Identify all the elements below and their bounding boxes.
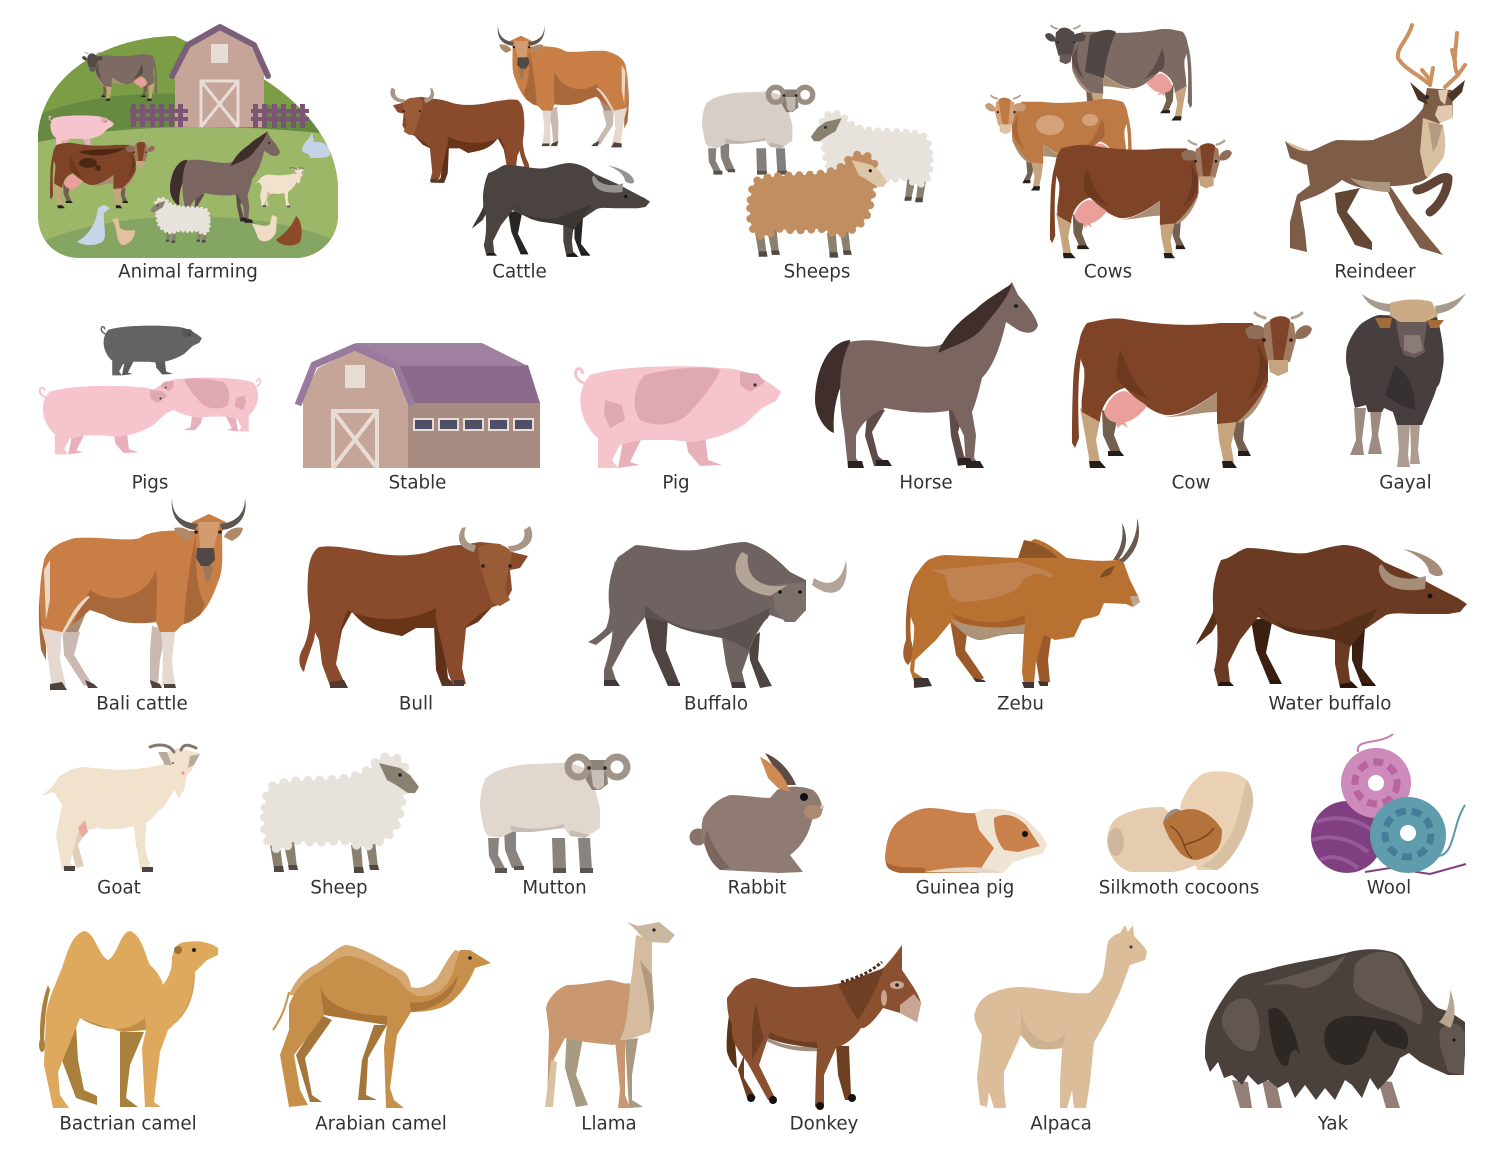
grey cow [1045, 26, 1192, 121]
barn front [303, 350, 408, 468]
label: Pig: Pig [662, 472, 690, 494]
illustration: Zebu [903, 518, 1140, 688]
illustration: Yak [1205, 949, 1465, 1108]
label: Buffalo: Buffalo [684, 694, 748, 714]
side roof [395, 365, 540, 403]
label: Cattle: Cattle [492, 262, 547, 282]
ram [702, 87, 813, 175]
teal yarn [1438, 805, 1465, 856]
illustration: Mutton [480, 757, 627, 873]
label: Alpaca: Alpaca [1030, 1114, 1092, 1134]
illustration: Wool [1311, 734, 1466, 874]
pupa [1163, 809, 1222, 860]
brown chicken [276, 216, 302, 246]
illustration: Reindeer [1285, 25, 1465, 255]
teal ball [1370, 797, 1446, 873]
side wall [405, 402, 540, 468]
panel: Animal farming [38, 27, 340, 258]
pink yarn [1358, 734, 1393, 752]
brown cow [50, 140, 155, 208]
hen [252, 215, 277, 241]
label: Goat: Goat [97, 878, 141, 898]
label: Silkmoth cocoons: Silkmoth cocoons [1099, 878, 1259, 898]
sheep [150, 199, 209, 243]
label: Bali cattle: Bali cattle [96, 694, 188, 714]
illustration: Donkey [727, 945, 921, 1110]
cocoon side shade [1200, 780, 1253, 870]
bali cow [498, 26, 629, 147]
fence [130, 104, 309, 128]
label: Horse: Horse [899, 472, 953, 494]
spotted pig [152, 378, 261, 431]
orange cow [985, 96, 1132, 191]
label: Bull: Bull [399, 694, 433, 714]
label: Animal farming: Animal farming [118, 262, 258, 282]
label: Yak: Yak [1317, 1114, 1349, 1134]
bull [390, 87, 529, 184]
gable trim [298, 347, 412, 405]
white sheep [811, 113, 930, 203]
windows [414, 419, 533, 430]
label: Stable: Stable [389, 472, 446, 494]
illustration: Stable [298, 343, 540, 468]
scene background [38, 36, 340, 258]
tan sheep [750, 155, 887, 258]
illustration: Bactrian camel [39, 931, 218, 1108]
label: Sheep: Sheep [310, 878, 368, 898]
illustration: Guinea pig [885, 808, 1047, 873]
duckling [112, 218, 135, 245]
illustration: Llama [545, 922, 675, 1108]
pupa segments [1170, 826, 1214, 858]
label: Cows: Cows [1084, 262, 1132, 282]
label: Bactrian camel: Bactrian camel [59, 1114, 197, 1134]
upright cocoon [1180, 771, 1253, 870]
illustration: Bali cattle [39, 498, 246, 690]
grey pig [101, 326, 202, 375]
label: Wool: Wool [1367, 878, 1411, 898]
illustration: Gayal [1346, 293, 1466, 467]
pink ball [1341, 748, 1411, 818]
label: Llama: Llama [581, 1114, 637, 1134]
horse [170, 131, 280, 223]
label: Gayal: Gayal [1379, 472, 1432, 494]
lying cocoon [1107, 807, 1200, 872]
label: Pigs: Pigs [132, 472, 168, 494]
label: Donkey: Donkey [790, 1114, 859, 1134]
illustration: Goat [40, 745, 200, 872]
rabbit [302, 132, 330, 158]
illustration: Rabbit [690, 753, 824, 873]
illustration: Sheep [264, 757, 419, 873]
illustration: Cows [985, 26, 1232, 258]
label: Sheeps: Sheeps [784, 262, 850, 282]
illustration: Horse [815, 282, 1038, 468]
grey cow [82, 52, 157, 101]
label: Cow: Cow [1172, 472, 1210, 494]
illustration: Silkmoth cocoons [1107, 771, 1253, 872]
main door [333, 411, 377, 468]
illustration: Water buffalo [1196, 545, 1467, 688]
brown cow [1050, 141, 1232, 258]
dark buffalo [472, 163, 650, 257]
goat [255, 168, 305, 207]
label: Water buffalo: Water buffalo [1269, 694, 1391, 714]
purple ball [1311, 801, 1383, 873]
label: Mutton: Mutton [522, 878, 587, 898]
illustration: Sheeps [702, 87, 930, 258]
label: Rabbit: Rabbit [728, 878, 786, 898]
pig [49, 115, 114, 148]
label: Reindeer: Reindeer [1334, 262, 1416, 282]
label: Guinea pig: Guinea pig [916, 878, 1014, 898]
illustration: Pig [576, 366, 781, 468]
illustration: Arabian camel [273, 945, 491, 1108]
pupa gap [1163, 809, 1190, 840]
goose [77, 205, 110, 245]
illustration: Bull [299, 526, 532, 688]
illustration: Buffalo [588, 542, 847, 688]
illustration: Cattle [390, 26, 650, 257]
loose yarn [1365, 864, 1466, 874]
label: Zebu: Zebu [997, 694, 1044, 714]
barn [172, 27, 268, 127]
pink pig [40, 386, 178, 454]
illustration: Cow [1072, 313, 1312, 468]
hay door [345, 365, 365, 388]
cocoon end shade [1108, 828, 1124, 856]
illustration: Alpaca [974, 925, 1147, 1108]
roof top [355, 343, 528, 366]
illustration: Pigs [40, 326, 261, 454]
label: Arabian camel: Arabian camel [315, 1114, 447, 1134]
